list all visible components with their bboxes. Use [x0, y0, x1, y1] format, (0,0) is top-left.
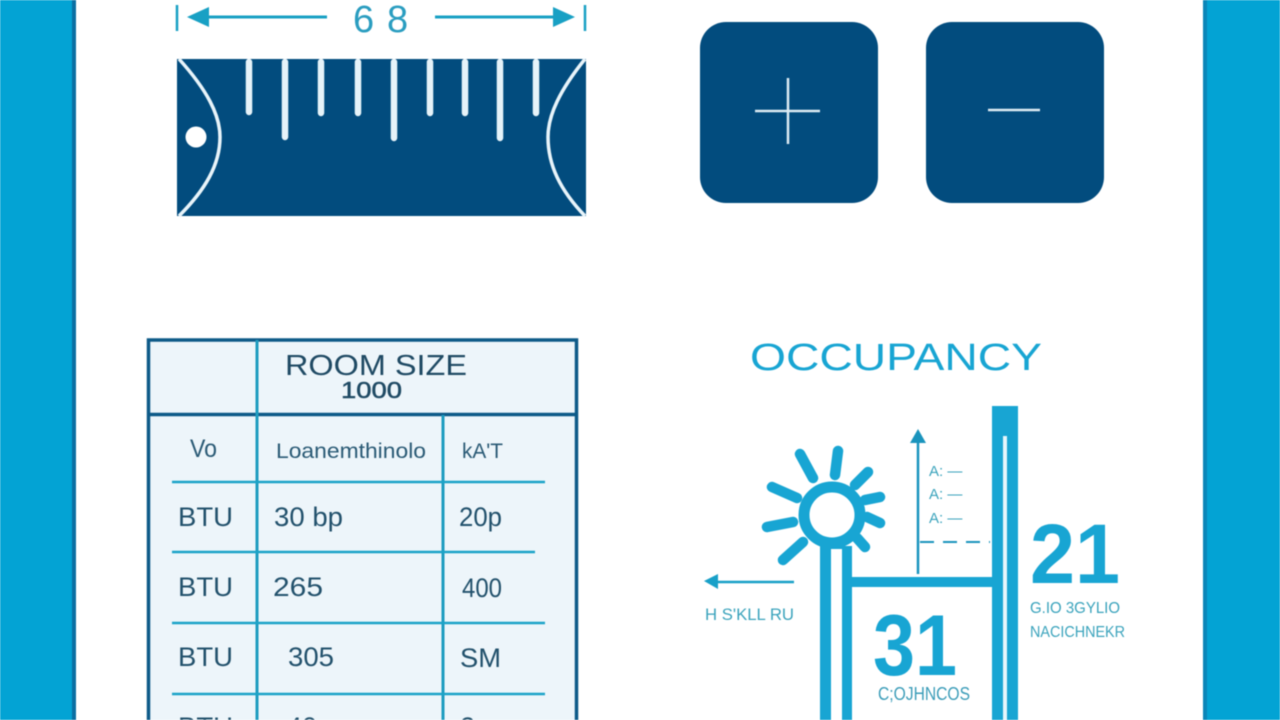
icon: minus button [926, 22, 1104, 203]
table rows: 305 [288, 642, 334, 672]
occupancy diagram [704, 406, 1125, 720]
stat: 31: C;OJHNCOS [878, 684, 970, 704]
table: room size [148, 340, 577, 720]
stat: 31: 31 [873, 598, 957, 694]
left arrow and label: H S'KLL RU [705, 605, 794, 624]
table rows [178, 502, 502, 720]
table column labels: Loanemthinolo [276, 440, 426, 463]
icon: sun [767, 451, 880, 560]
table rows: BTU [178, 642, 233, 672]
width dimension indicator [177, 0, 585, 41]
stat: 21: NACICHNEKR [1030, 624, 1125, 641]
up arrow with level marks: A: — [929, 463, 962, 480]
icon: plus button [700, 22, 878, 203]
icon: measuring ruler [177, 59, 586, 216]
table: room size: 1000 [341, 377, 402, 403]
table rows: 265 [273, 572, 323, 602]
table column labels [190, 435, 503, 463]
table rows: BTU [178, 572, 233, 602]
table header: ROOM SIZE [285, 350, 467, 382]
dimension value: 68 [353, 0, 408, 41]
stat: 21: G.IO 3GYLIO [1030, 600, 1120, 617]
up arrow with level marks: A: — [929, 486, 962, 503]
table column labels: kA'T [462, 440, 503, 463]
table rows: 20p [459, 502, 502, 532]
stat: 21: 21 [1030, 507, 1120, 601]
table rows: 400 [462, 573, 502, 603]
up arrow with level marks [910, 429, 990, 574]
table rows: BTU [178, 502, 233, 532]
stat: 21 [1030, 507, 1125, 641]
building outline [820, 406, 1018, 720]
table rows: SM [460, 643, 501, 673]
table rows: 30 bp [274, 502, 343, 532]
heading: occupancy: OCCUPANCY [750, 337, 1042, 379]
up arrow with level marks: A: — [929, 510, 962, 527]
table column labels: Vo [190, 435, 217, 463]
left arrow and label [704, 574, 794, 624]
